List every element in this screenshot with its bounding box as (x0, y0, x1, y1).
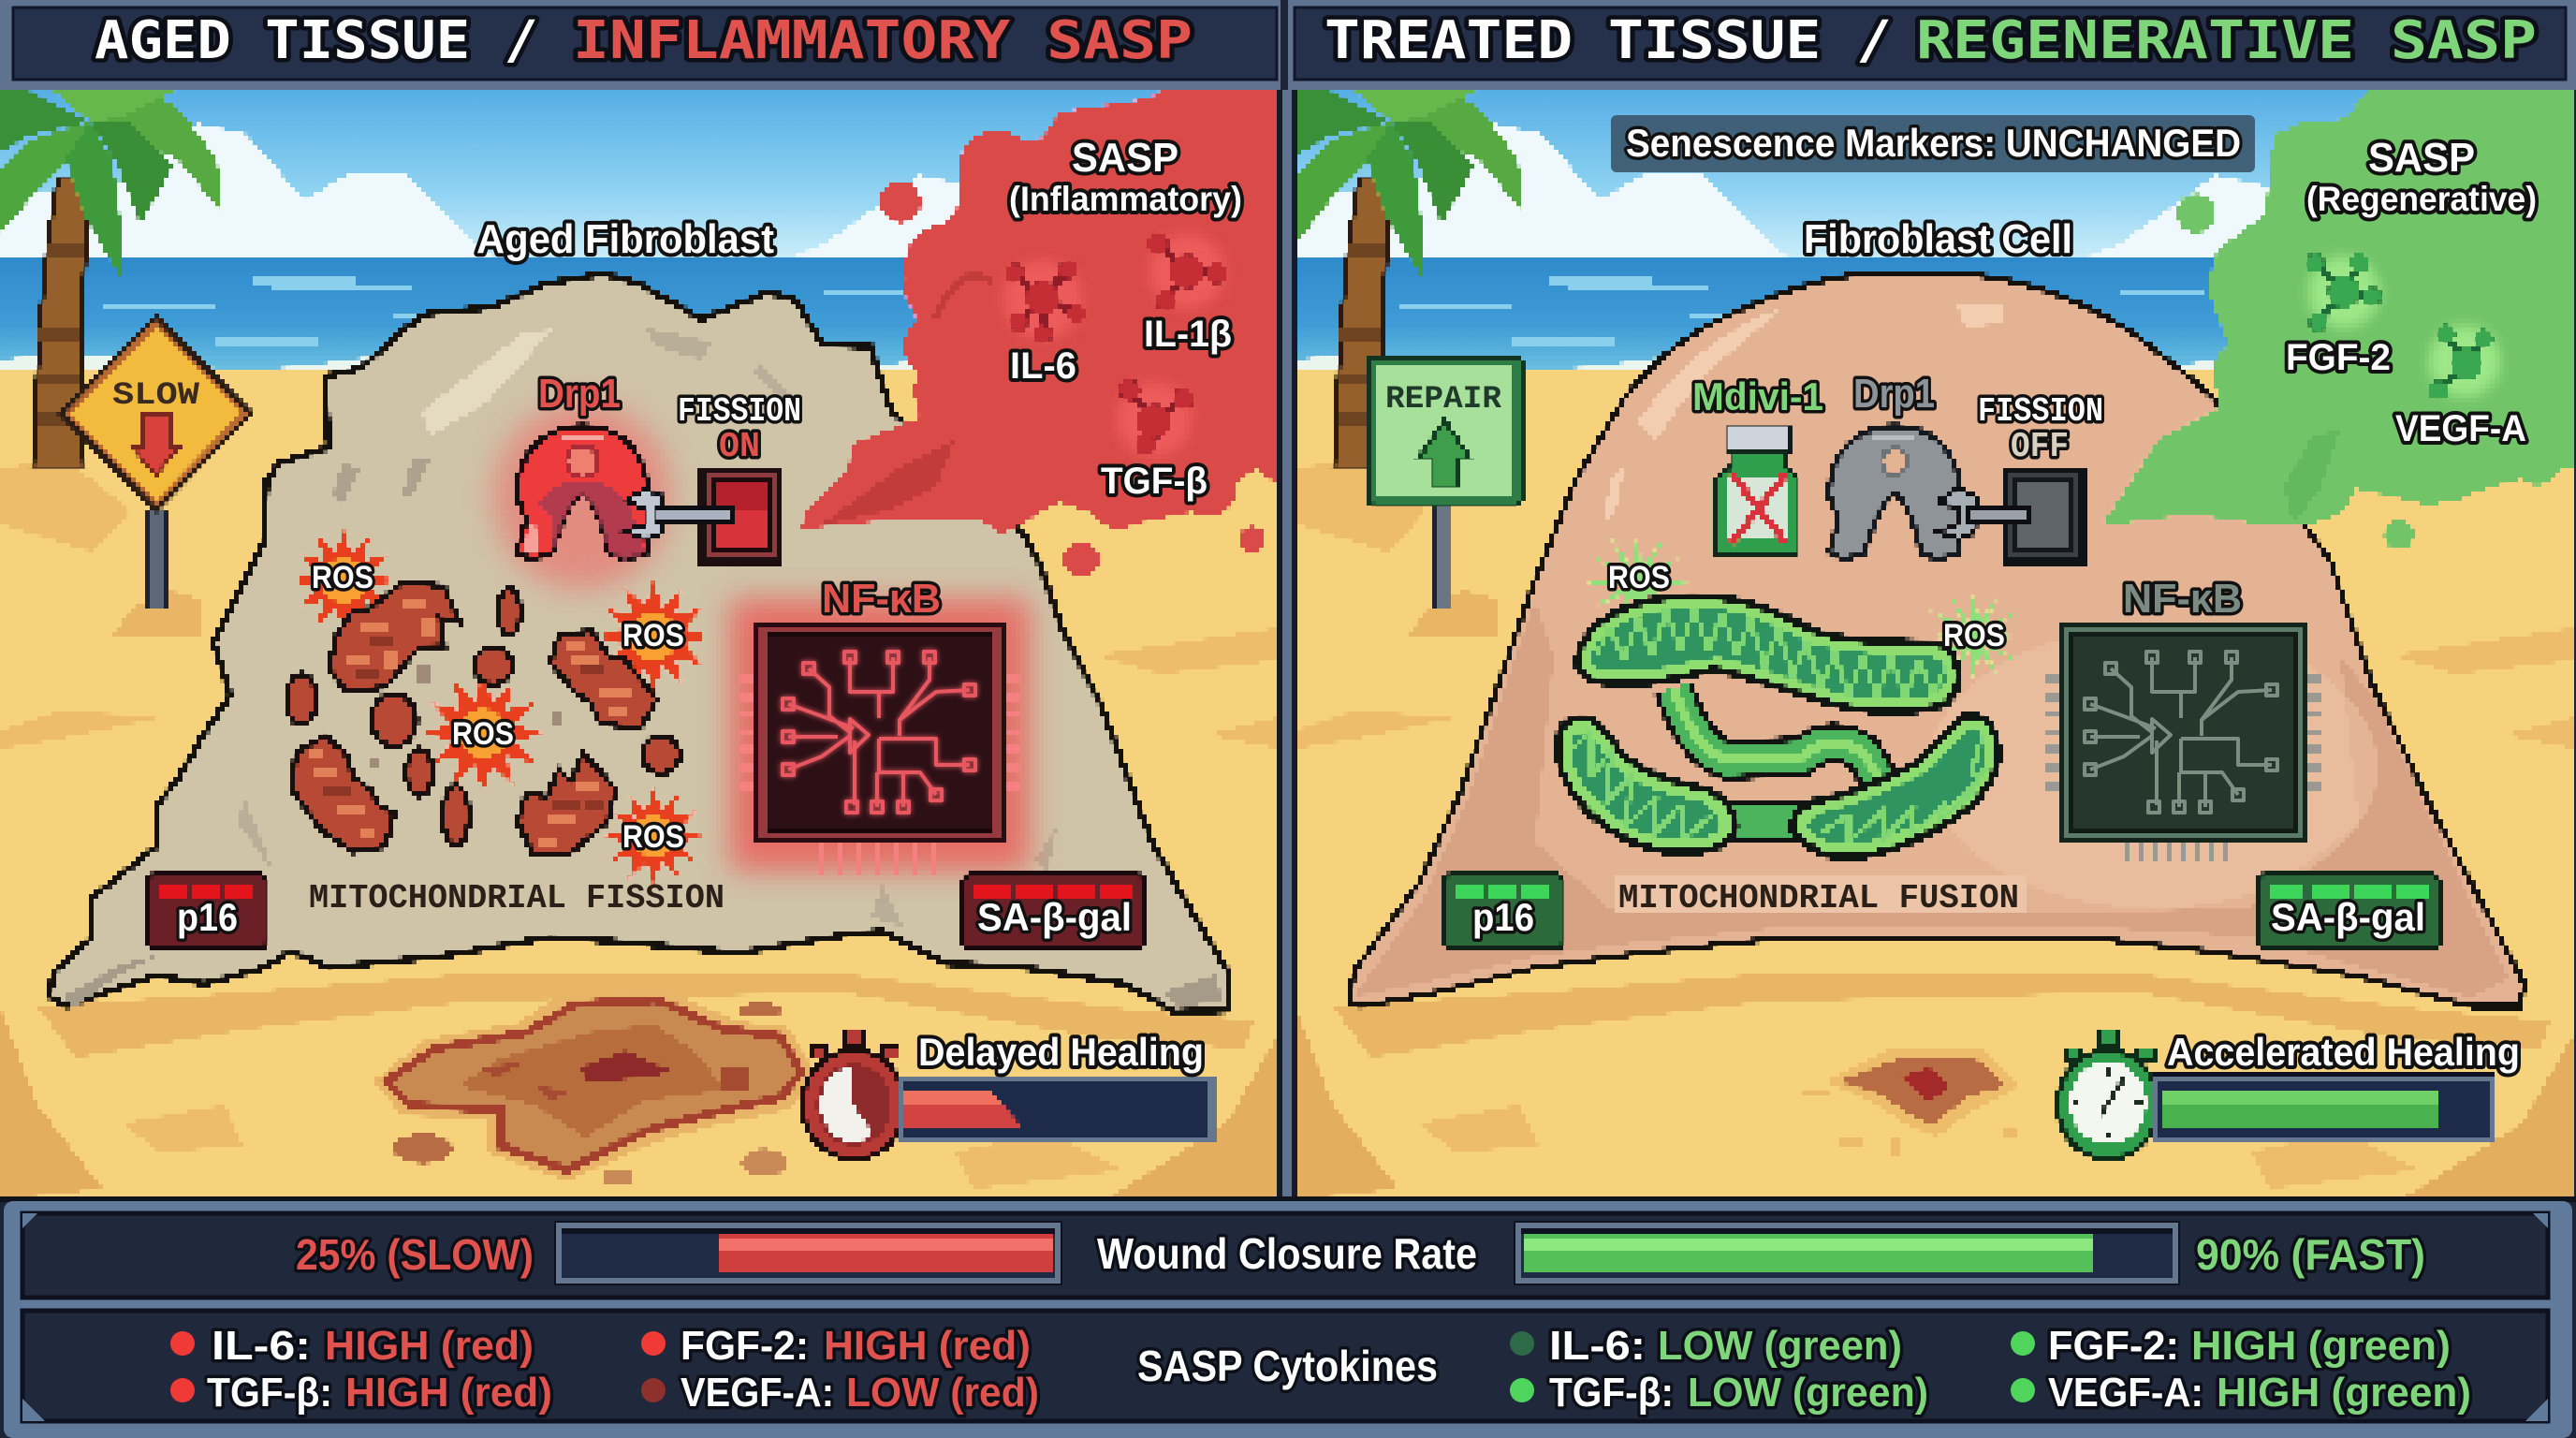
labels: treated tissue panel: ROS (1943, 618, 2005, 653)
header: treated tissue (1288, 0, 2576, 90)
wound closure row: 90% (FAST) (2196, 1230, 2425, 1279)
labels: aged tissue panel: MITOCHONDRIAL FISSION (309, 879, 724, 917)
cytokine legend: treated: HIGH (green) (2217, 1370, 2471, 1416)
icon: TGF-beta molecule (1117, 380, 1193, 457)
centre divider (1277, 90, 1297, 1204)
cytokine legend title: SASP Cytokines (1137, 1342, 1438, 1390)
chip circuit traces: active (783, 652, 975, 813)
panel: aged tissue scene artwork (0, 90, 1281, 1203)
cytokine legend: aged: VEGF-A: (681, 1370, 834, 1416)
labels: treated tissue panel: VEGF-A (2395, 408, 2526, 449)
ROS bursts (292, 529, 710, 885)
wound closure row: Wound Closure Rate (1097, 1229, 1477, 1278)
icon: IL-1beta molecule (1148, 234, 1226, 311)
header: aged tissue: INFLAMMATORY SASP (573, 10, 1193, 71)
cytokine legend: treated: LOW (green) (1688, 1370, 1928, 1416)
p16 badge (1444, 874, 1563, 949)
wound: small (1802, 1047, 2020, 1154)
cytokine legend: aged: HIGH (red) (345, 1370, 552, 1416)
cytokine legend: treated: FGF-2: (2048, 1323, 2179, 1369)
labels: treated tissue panel: Mdivi-1 (1692, 374, 1823, 418)
labels: aged tissue panel: SLOW (112, 378, 200, 414)
icon: fission switch off (1968, 470, 2083, 562)
cytokine legend: aged: IL-6: (212, 1323, 311, 1369)
header: aged tissue: AGED TISSUE / (95, 10, 538, 71)
stopwatch: delayed (802, 1030, 905, 1159)
icon: slow road sign (61, 317, 252, 609)
cytokine legend: aged: LOW (red) (846, 1370, 1039, 1416)
labels: treated tissue panel: Drp1 (1853, 371, 1935, 417)
labels: treated tissue panel: SASP (2368, 135, 2475, 181)
icon: repair sign (1368, 357, 1522, 609)
beach background (0, 90, 1281, 1203)
ROS bursts: faint (1586, 531, 2026, 688)
beach background (1295, 90, 2576, 1203)
header: aged tissue (0, 0, 1281, 90)
p16 badge (148, 874, 267, 949)
labels: aged tissue panel: Delayed Healing (918, 1030, 1204, 1074)
cytokine legend: aged (170, 1323, 1039, 1416)
chip circuit traces: idle (2085, 652, 2277, 813)
gauge: 25% slow (554, 1221, 1062, 1285)
panel: healthy fibroblast body (1350, 273, 2525, 1006)
labels: aged tissue panel (112, 135, 1242, 1074)
stopwatch: accelerated (2057, 1030, 2159, 1159)
icon: NF-kB chip active (730, 599, 1030, 874)
labels: treated tissue panel: MITOCHONDRIAL FUSION (1618, 879, 2019, 917)
progress bar: delayed healing (897, 1075, 1217, 1143)
labels: aged tissue panel: Aged Fibroblast (476, 216, 774, 262)
panel: fibroblast body (50, 273, 1228, 1012)
bottom dashboard (0, 1196, 2576, 1438)
labels: treated tissue panel: p16 (1472, 895, 1534, 939)
labels: treated tissue panel: ROS (1608, 560, 1670, 595)
labels: treated tissue panel: OFF (2011, 427, 2069, 467)
cytokine legend: aged: FGF-2: (681, 1323, 809, 1369)
cytokine legend: treated (1510, 1323, 2471, 1416)
labels: aged tissue panel: p16 (177, 895, 238, 939)
cytokine legend: treated: TGF-β: (1549, 1370, 1674, 1416)
cytokine legend: treated: LOW (green) (1658, 1323, 1902, 1369)
SASP cloud: regenerative (2101, 90, 2576, 550)
SASP cloud: inflammatory (801, 90, 1281, 578)
labels: treated tissue panel (1385, 135, 2537, 1074)
labels: treated tissue panel: FISSION (1978, 392, 2103, 431)
labels: aged tissue panel: ROS (622, 819, 684, 855)
labels: aged tissue panel: ON (719, 427, 760, 467)
cytokine legend: aged: TGF-β: (207, 1370, 332, 1416)
icon: NF-kB chip idle (1928, 624, 2378, 908)
labels: aged tissue panel: (Inflammatory) (1009, 180, 1242, 218)
icon: IL-6 molecule (1003, 260, 1086, 344)
wound closure row (296, 1221, 2425, 1285)
header: treated tissue: REGENERATIVE SASP (1916, 10, 2537, 71)
icon: palm tree (0, 90, 222, 468)
icon: inhibited Drp1 enzyme (1829, 426, 2035, 560)
cytokine legend: aged: HIGH (red) (325, 1323, 534, 1369)
labels: treated tissue panel: REPAIR (1385, 382, 1502, 418)
labels: aged tissue panel: ROS (452, 716, 514, 752)
fragmented mitochondria (286, 582, 680, 856)
icon: Mdivi-1 bottle (1717, 426, 1797, 554)
labels: treated tissue panel: FGF-2 (2286, 337, 2391, 378)
header: treated tissue: TREATED TISSUE / (1325, 10, 1892, 71)
SA-beta-gal badge (963, 874, 1144, 949)
callout: senescence markers: Senescence Markers: UNCHANGED (1626, 121, 2241, 165)
SA-beta-gal badge (2259, 874, 2439, 949)
progress bar: accelerated healing (2152, 1073, 2496, 1144)
labels: aged tissue panel: NF-κB (822, 576, 941, 622)
icon: VEGF-A molecule (2429, 325, 2500, 400)
labels: aged tissue panel: TGF-β (1101, 461, 1208, 502)
labels: aged tissue panel: SASP (1072, 135, 1178, 181)
cytokine legend: treated: IL-6: (1549, 1323, 1646, 1369)
labels: aged tissue panel: FISSION (678, 392, 801, 431)
label backing: fusion (1613, 874, 2027, 915)
panel: treated tissue scene artwork (1292, 90, 2576, 1203)
icon: FGF-2 molecule (2305, 254, 2381, 331)
icon: active Drp1 enzyme (493, 403, 671, 590)
icon: fission switch on (655, 470, 781, 562)
labels: aged tissue panel: ROS (312, 560, 373, 595)
wound closure row: 25% (SLOW) (296, 1230, 534, 1279)
labels: treated tissue panel: Fibroblast Cell (1804, 216, 2072, 262)
labels: aged tissue panel: IL-1β (1144, 314, 1232, 355)
wound: large (373, 989, 814, 1185)
icon: palm tree (1292, 90, 1523, 468)
labels: aged tissue panel: ROS (622, 618, 684, 653)
labels: treated tissue panel: SA-β-gal (2271, 895, 2425, 939)
cytokine legend: treated: VEGF-A: (2048, 1370, 2203, 1416)
labels: treated tissue panel: NF-κB (2123, 576, 2242, 622)
labels: treated tissue panel: Accelerated Healing (2167, 1030, 2520, 1074)
labels: aged tissue panel: Drp1 (538, 371, 621, 417)
labels: aged tissue panel: IL-6 (1010, 345, 1076, 387)
cytokine legend: aged: HIGH (red) (824, 1323, 1031, 1369)
fused mitochondria (1558, 596, 1998, 858)
cytokine legend: treated: HIGH (green) (2191, 1323, 2451, 1369)
labels: treated tissue panel: (Regenerative) (2306, 180, 2537, 218)
gauge: 90% fast (1514, 1221, 2180, 1285)
labels: aged tissue panel: SA-β-gal (977, 895, 1132, 939)
